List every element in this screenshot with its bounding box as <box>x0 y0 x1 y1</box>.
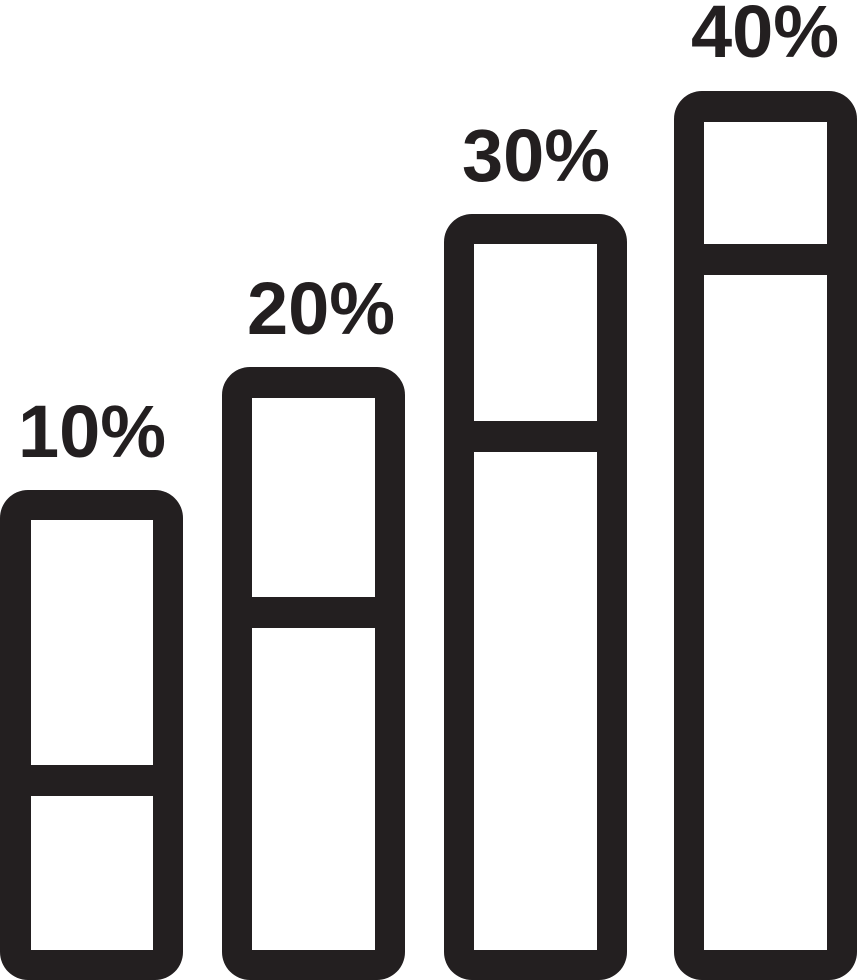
bar: 20% <box>222 367 405 980</box>
label: 30%: 30% <box>462 114 610 197</box>
label: 10%: 10% <box>18 390 166 473</box>
label: 20%: 20% <box>247 267 395 350</box>
bar: 40% <box>674 91 857 980</box>
bar: 30% <box>444 214 627 980</box>
bar: 10% <box>0 490 183 980</box>
